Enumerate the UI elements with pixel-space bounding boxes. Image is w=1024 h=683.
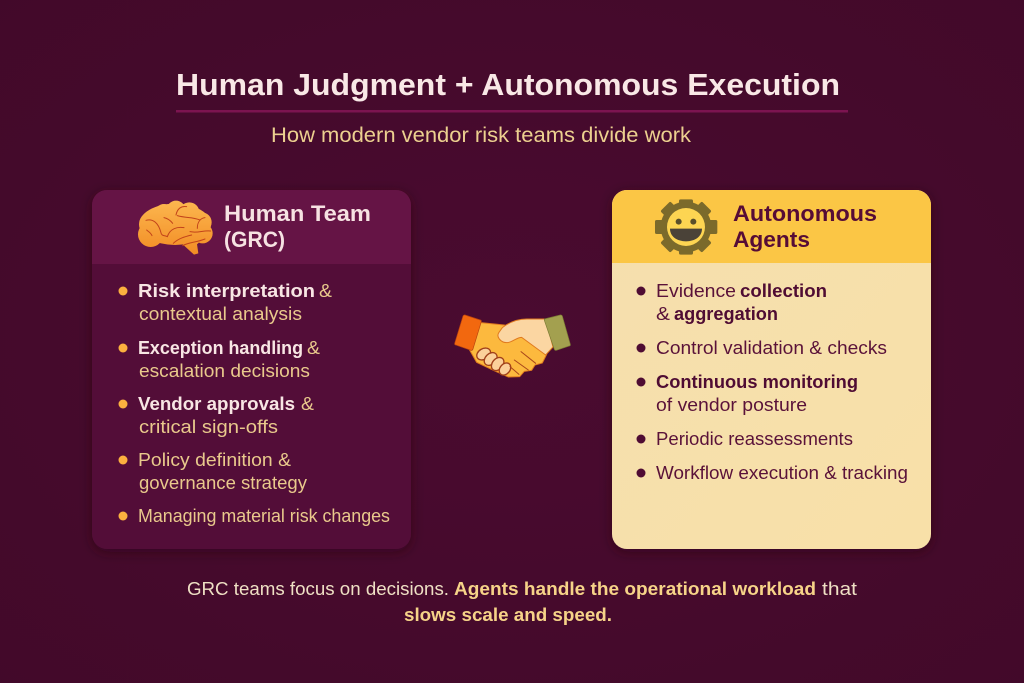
autonomous agents heading: Autonomous [733,201,877,226]
title: Human Judgment + Autonomous Execution [176,67,840,102]
bullet: managing material risk changes: Managing material risk changes [138,506,390,526]
human team heading [224,201,371,252]
human team heading: (GRC) [224,227,285,252]
title underline [176,110,848,112]
panel: human team [92,190,411,549]
footer summary: slows scale and speed. [404,604,612,625]
footer summary [187,578,857,625]
footer summary: GRC teams focus on decisions. [187,578,449,599]
footer summary: that [822,578,857,599]
panel: autonomous agents [612,190,931,549]
autonomous agents heading [733,201,877,252]
bullet: continuous monitoring: of vendor posture [656,395,807,415]
icon: handshake [455,315,570,377]
bullet: exception handling: & [307,338,320,358]
bullet: risk interpretation: contextual analysis [139,304,302,324]
bullet: evidence collection [636,281,827,324]
autonomous agents header band [612,190,931,263]
bullet: vendor approvals [118,394,314,437]
bullet: control validation: Control validation & checks [656,338,887,358]
bullet: workflow execution: Workflow execution & tracking [656,463,908,483]
bullet: policy definition: governance strategy [139,473,307,493]
bullet: vendor approvals: & [301,394,314,414]
bullet: evidence collection: Evidence [656,281,736,301]
bullet: risk interpretation: & [319,281,332,301]
bullet: continuous monitoring [636,372,858,415]
human team header band [92,190,411,264]
bullet: evidence collection: aggregation [674,304,778,324]
bullet: continuous monitoring: Continuous monitoring [656,372,858,392]
icon: brain [138,201,213,255]
icon: smiling gear [655,199,717,255]
bullet: exception handling [118,338,320,381]
right cuff [544,315,570,350]
bullet: periodic reassessments: Periodic reassessments [656,429,853,449]
autonomous agents heading: Agents [733,227,810,252]
bullet: exception handling: escalation decisions [139,361,310,381]
subtitle: How modern vendor risk teams divide work [271,124,692,147]
human team heading: Human Team [224,201,371,226]
left cuff [455,315,481,350]
bullet: evidence collection: & [656,304,670,324]
bullet: policy definition: Policy definition & [138,450,291,470]
bullet: vendor approvals: critical sign-offs [139,417,278,437]
footer summary: Agents handle the operational workload [454,578,816,599]
bullet: risk interpretation: Risk interpretation [138,281,315,301]
bullet: exception handling: Exception handling [138,338,303,358]
bullet: risk interpretation [118,281,332,324]
bullet: evidence collection: collection [740,281,827,301]
bullet: vendor approvals: Vendor approvals [138,394,295,414]
bullet: policy definition [118,450,307,493]
